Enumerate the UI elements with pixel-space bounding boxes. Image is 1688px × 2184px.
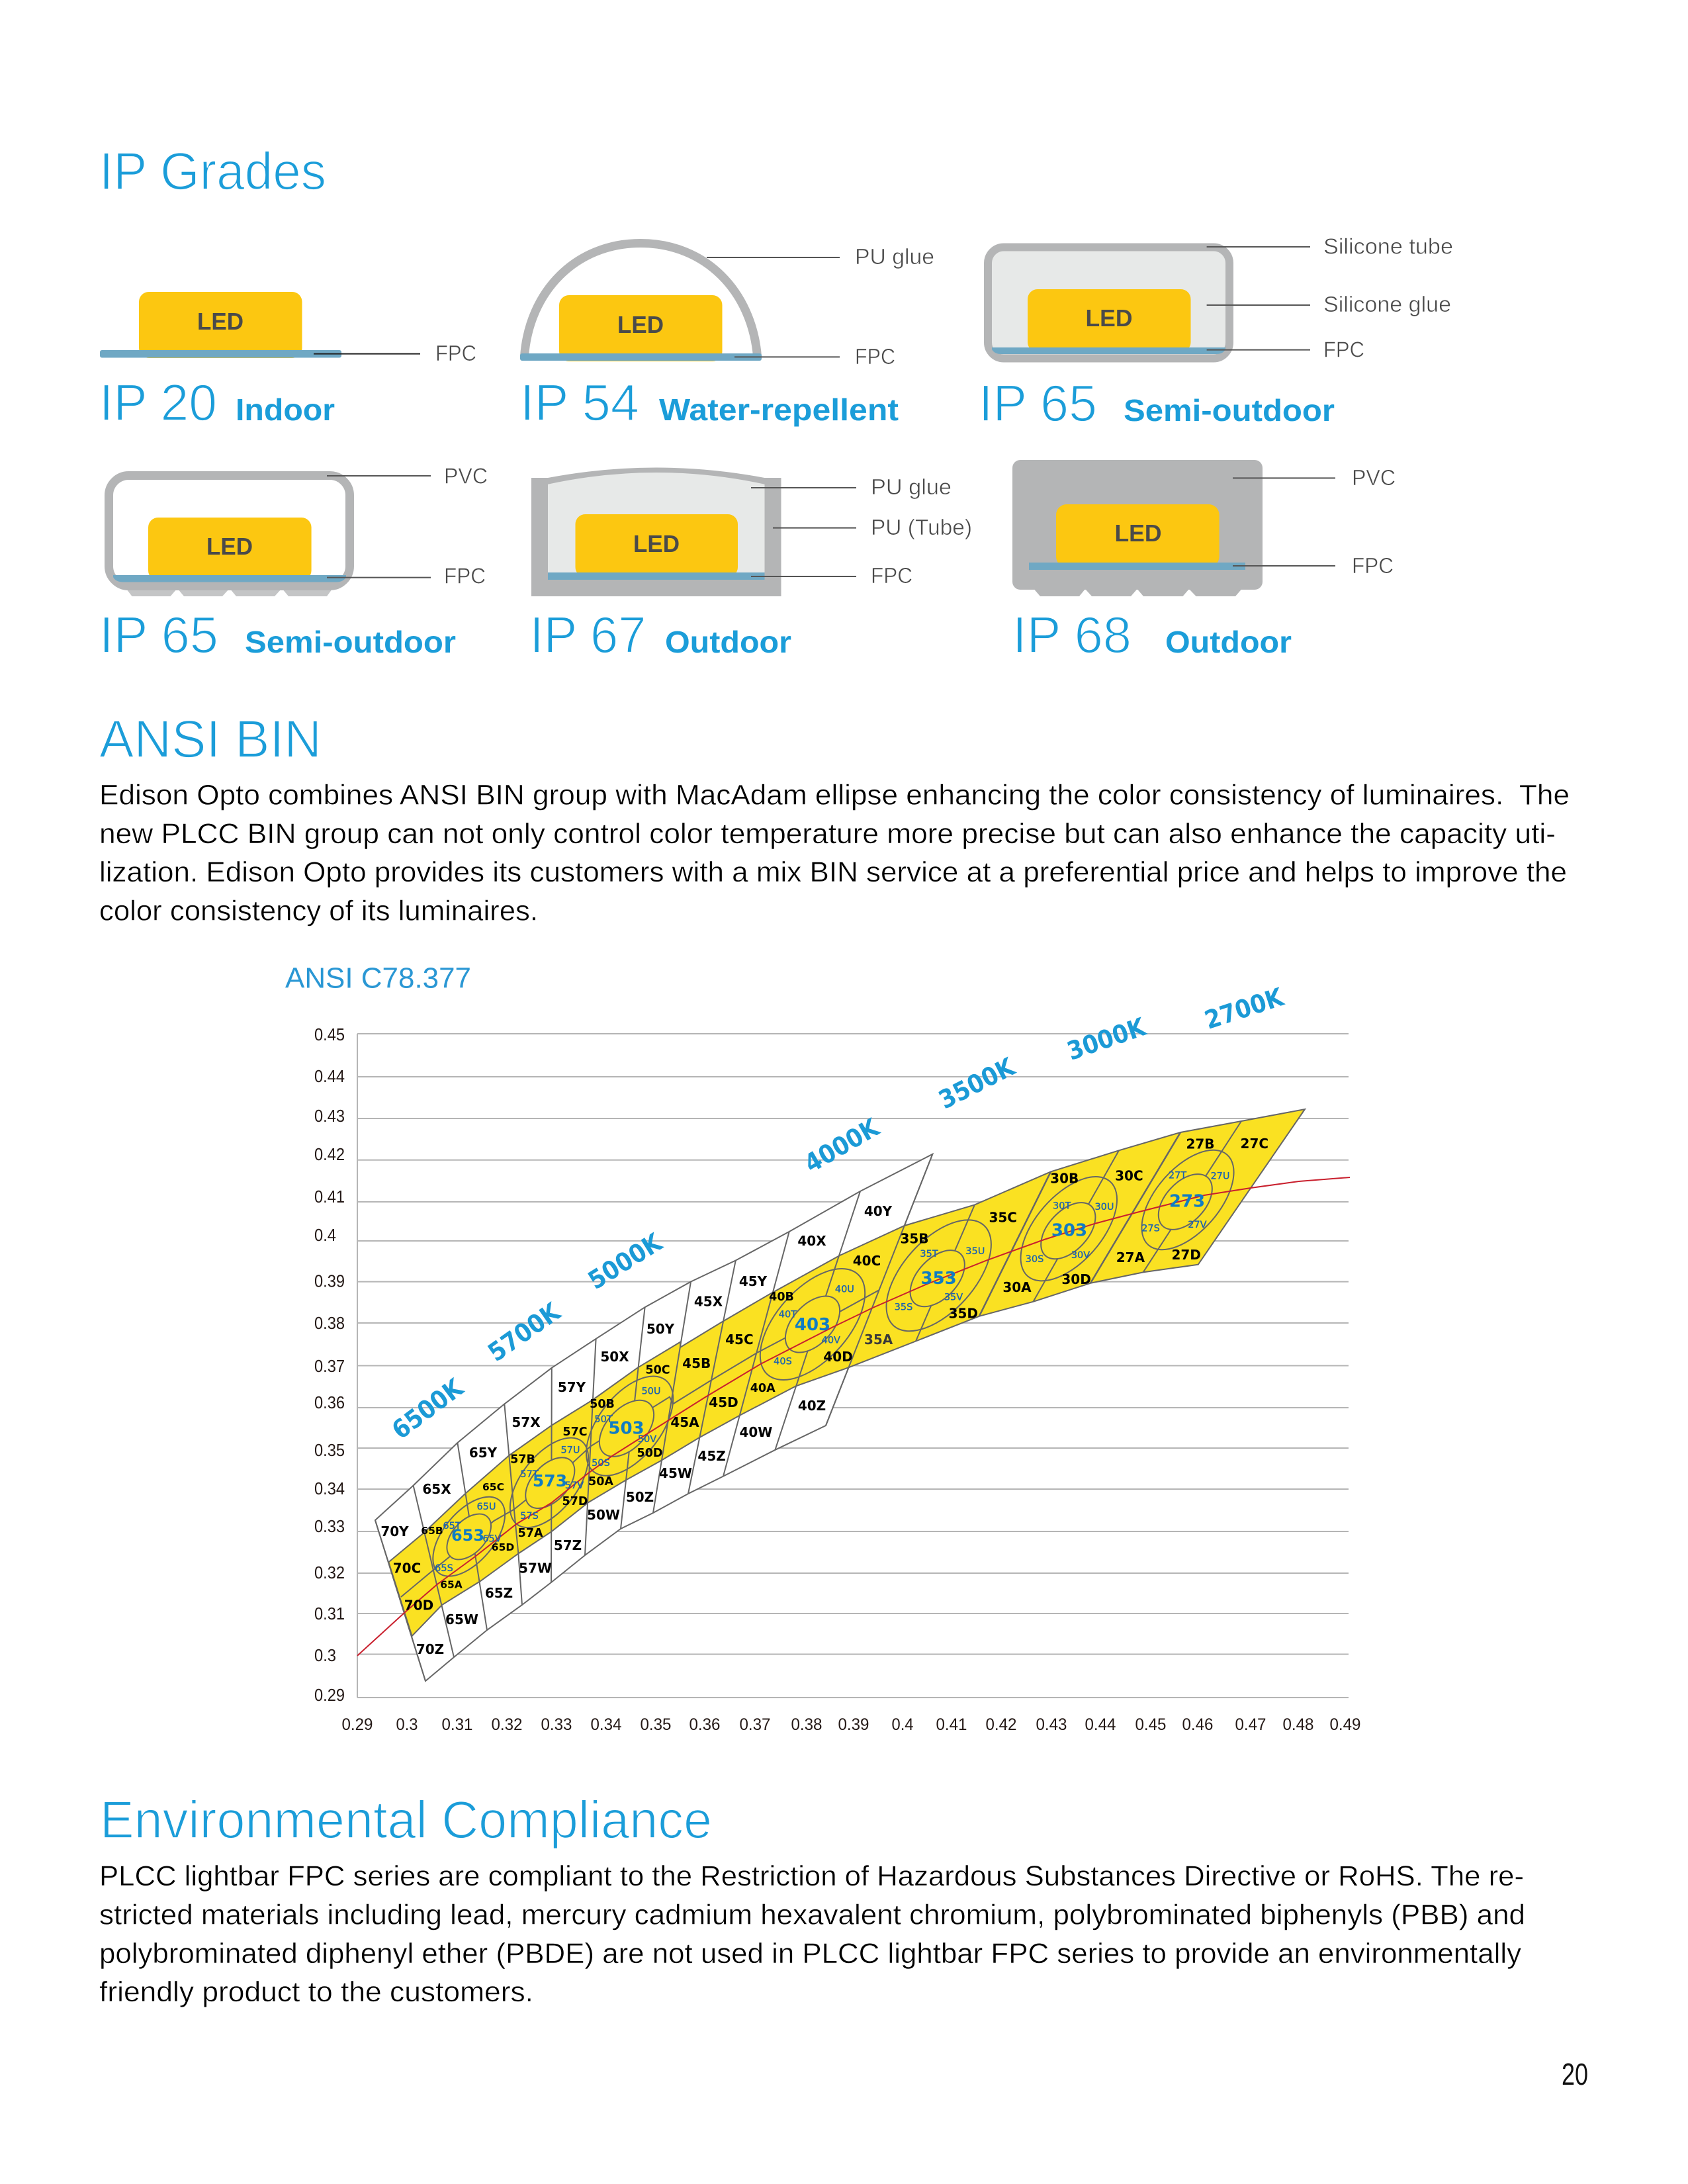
y axis labels: 0.29 xyxy=(314,1685,345,1705)
y axis labels: 0.37 xyxy=(314,1356,345,1376)
colour temperature labels: 3500K xyxy=(934,1052,1020,1115)
label: IP 65 Semi-outdoor: IP 65 xyxy=(979,374,1097,432)
bin labels: outer and main: 57Z xyxy=(554,1537,582,1553)
bin labels: outer and main: 50Y xyxy=(646,1321,675,1337)
bin labels: outer and main: 50X xyxy=(600,1349,629,1365)
bin labels: ellipse sub-bins: 27T xyxy=(1169,1170,1186,1181)
bin labels: ellipse sub-bins: 30T xyxy=(1053,1201,1071,1211)
bin labels: outer and main: 57C xyxy=(562,1426,588,1439)
bin labels: ellipse sub-bins: 40V xyxy=(822,1336,840,1346)
text block: Environmental Compliance description: PLCC lightbar FPC series are compliant to the Restriction of Hazardous Substances Directive or RoHS. The re- xyxy=(99,1860,1524,1892)
icon: IP 20 LED on FPC: LED xyxy=(197,308,244,335)
bin labels: outer and main: 57X xyxy=(511,1414,541,1430)
x axis labels: 0.46 xyxy=(1182,1715,1214,1734)
x axis labels: 0.37 xyxy=(740,1715,770,1734)
bin labels: outer and main: 50C xyxy=(645,1363,670,1377)
bin labels: ellipse centres: 573 xyxy=(533,1471,567,1490)
bin labels: outer and main: 57A xyxy=(518,1527,543,1540)
bin labels: ellipse sub-bins: 50U xyxy=(641,1387,661,1397)
bin labels: outer and main: 45D xyxy=(709,1394,738,1410)
label: IP 54 Water-repellent: IP 54 xyxy=(520,373,639,432)
bin labels: ellipse sub-bins: 65S xyxy=(435,1563,453,1574)
icon: IP 68 solid PVC with LED: LED xyxy=(1114,520,1162,547)
bin labels: outer and main: 35B xyxy=(900,1230,929,1246)
bin labels: outer and main: 40C xyxy=(853,1253,881,1269)
heading: Environmental Compliance: Environmental Compliance xyxy=(100,1790,712,1849)
bin labels: outer and main: 57D xyxy=(562,1495,588,1508)
bin labels: outer and main: 65X xyxy=(422,1481,451,1497)
x axis labels: 0.3 xyxy=(396,1715,418,1734)
bin labels: outer and main: 65Y xyxy=(469,1445,498,1461)
bin labels: ellipse sub-bins: 57U xyxy=(560,1445,580,1456)
y axis labels: 0.36 xyxy=(314,1392,345,1412)
bin labels: outer and main: 40D xyxy=(823,1349,853,1365)
x axis labels: 0.41 xyxy=(936,1715,967,1734)
x axis labels: 0.44 xyxy=(1085,1715,1116,1734)
y axis labels: 0.44 xyxy=(314,1066,345,1086)
x axis labels: 0.4 xyxy=(892,1715,914,1734)
callout: PVC: PVC xyxy=(1352,465,1396,490)
bin labels: ellipse sub-bins: 35U xyxy=(965,1246,985,1257)
bin labels: ellipse sub-bins: 50V xyxy=(638,1434,656,1445)
white outer bin region xyxy=(375,1154,932,1681)
MacAdam ellipses xyxy=(420,1134,1251,1589)
callout: FPC: FPC xyxy=(444,564,486,588)
callout: PU glue: PU glue xyxy=(871,475,952,499)
heading: IP Grades: IP Grades xyxy=(99,142,326,201)
x axis labels: 0.48 xyxy=(1282,1715,1314,1734)
y axis labels: 0.34 xyxy=(314,1479,345,1498)
bin labels: outer and main: 50Z xyxy=(626,1489,654,1505)
y axis labels: 0.38 xyxy=(314,1313,345,1333)
bin labels: outer and main: 57Y xyxy=(558,1379,586,1395)
colour temperature labels: 4000K xyxy=(799,1113,885,1179)
bin labels: outer and main: 27C xyxy=(1241,1136,1268,1152)
yellow central bin band xyxy=(388,1109,1305,1636)
label: IP 65 Semi-outdoor xyxy=(979,374,1335,432)
label: IP 20 Indoor: Indoor xyxy=(236,392,335,427)
bin labels: outer and main: 45Z xyxy=(697,1448,726,1464)
x axis labels: 0.29 xyxy=(341,1715,373,1734)
Planckian locus red curve xyxy=(357,1177,1350,1656)
icon: IP 65 PVC tube with LED: LED xyxy=(206,533,253,560)
callout: PVC: PVC xyxy=(444,464,488,488)
bin labels: outer and main: 45Y xyxy=(739,1273,768,1289)
bin labels: outer and main: 70D xyxy=(404,1598,433,1614)
bin labels: outer and main: 35A xyxy=(864,1332,893,1347)
colour temperature labels: 3000K xyxy=(1063,1012,1150,1066)
text block: Environmental Compliance description xyxy=(99,1860,1525,2008)
text block: ANSI BIN description: color consistency of its luminaires. xyxy=(99,895,538,927)
icon: IP 65 silicone tube with LED xyxy=(988,248,1229,359)
bin labels: outer and main: 50B xyxy=(590,1398,615,1411)
y axis labels: 0.41 xyxy=(314,1187,345,1206)
bin labels: ellipse sub-bins: 35T xyxy=(920,1249,938,1259)
bin labels: ellipse sub-bins: 65V xyxy=(482,1534,502,1545)
bin labels: ellipse sub-bins: 35S xyxy=(895,1302,912,1313)
label: IP 65 Semi-outdoor xyxy=(99,606,456,664)
label: IP 68 Outdoor xyxy=(1012,606,1292,664)
label: IP 65 Semi-outdoor: Semi-outdoor xyxy=(1124,393,1335,428)
label: IP 65 Semi-outdoor: IP 65 xyxy=(99,606,218,664)
x axis labels: 0.38 xyxy=(791,1715,822,1734)
bin labels: outer and main: 40W xyxy=(739,1424,772,1440)
text block: Environmental Compliance description: stricted materials including lead, mercury cadmium hexavalent chromium, polybrominated biphenyls (PBB) and xyxy=(99,1899,1525,1931)
label: IP 20 Indoor: IP 20 xyxy=(99,373,217,432)
bin labels: outer and main: 40A xyxy=(750,1382,776,1395)
label: IP 20 Indoor xyxy=(99,373,335,432)
bin labels: ellipse sub-bins: 65T xyxy=(443,1521,461,1531)
text block: Environmental Compliance description: polybrominated diphenyl ether (PBDE) are not used in PLCC lightbar FPC series to provide an environmentally xyxy=(99,1938,1522,1970)
y axis labels: 0.39 xyxy=(314,1271,345,1291)
bin labels: ellipse sub-bins: 57S xyxy=(520,1511,539,1522)
label: IP 68 Outdoor: Outdoor xyxy=(1165,625,1292,659)
panel: IP 65 semi-outdoor silicone xyxy=(979,234,1453,432)
bin labels: outer and main: 30B xyxy=(1050,1171,1079,1187)
bin labels: outer and main: 45C xyxy=(725,1332,754,1347)
bin labels: outer and main: 30D xyxy=(1061,1271,1091,1287)
icon: IP 67 PU tube with LED xyxy=(531,467,781,596)
text block: ANSI BIN description xyxy=(99,780,1570,927)
colour temperature labels: 6500K xyxy=(386,1373,469,1445)
y axis labels: 0.32 xyxy=(314,1563,345,1582)
bin labels: ellipse centres xyxy=(451,1191,1205,1545)
chart title: ANSI C78.377: ANSI C78.377 xyxy=(285,962,471,995)
bin labels: ellipse centres: 273 xyxy=(1169,1191,1205,1211)
callout: Silicone glue: Silicone glue xyxy=(1323,292,1451,316)
x axis labels: 0.31 xyxy=(442,1715,472,1734)
icon: IP 20 LED on FPC xyxy=(100,292,341,358)
callout: FPC: FPC xyxy=(1352,553,1394,578)
colour temperature labels: 5700K xyxy=(482,1297,566,1367)
bin labels: outer and main: 45X xyxy=(694,1294,723,1310)
bin labels: outer and main: 30A xyxy=(1002,1279,1032,1295)
x axis labels: 0.45 xyxy=(1135,1715,1166,1734)
bin labels: ellipse sub-bins: 30U xyxy=(1094,1202,1114,1212)
bin labels: outer and main: 57W xyxy=(519,1561,552,1576)
icon: IP 65 PVC tube with LED xyxy=(109,475,349,596)
text block: ANSI BIN description: new PLCC BIN group can not only control color temperature more precise but can also enhance the capacity uti- xyxy=(99,818,1556,850)
y axis labels: 0.42 xyxy=(314,1144,345,1164)
y axis labels: 0.33 xyxy=(314,1516,345,1536)
bin labels: outer and main: 70C xyxy=(393,1561,421,1576)
bin labels: outer and main: 45A xyxy=(670,1414,699,1430)
y axis labels xyxy=(314,1024,345,1705)
bin labels: outer and main: 50W xyxy=(587,1507,620,1523)
callout: FPC: FPC xyxy=(435,341,476,365)
panel: IP 68 outdoor xyxy=(1012,460,1396,664)
icon: IP 54 dome with LED xyxy=(520,244,762,361)
bin labels: ellipse sub-bins: 27U xyxy=(1210,1171,1230,1182)
x axis labels: 0.47 xyxy=(1235,1715,1266,1734)
label: IP 68 Outdoor: IP 68 xyxy=(1012,606,1132,664)
panel: IP 54 water-repellent xyxy=(520,244,934,432)
y axis labels: 0.4 xyxy=(314,1225,336,1245)
y axis labels: 0.35 xyxy=(314,1440,345,1460)
x axis labels: 0.43 xyxy=(1036,1715,1067,1734)
callout: PU glue: PU glue xyxy=(855,244,934,269)
icon: IP 68 solid PVC with LED xyxy=(1012,460,1263,596)
x axis labels: 0.32 xyxy=(491,1715,523,1734)
bin labels: ellipse centres: 403 xyxy=(795,1315,830,1335)
bin labels: outer and main: 40Y xyxy=(864,1203,893,1219)
bin labels: outer and main: 27D xyxy=(1171,1247,1201,1263)
colour temperature labels: 5000K xyxy=(583,1227,668,1295)
x axis labels: 0.42 xyxy=(986,1715,1016,1734)
x axis labels: 0.36 xyxy=(689,1715,720,1734)
callout: PU (Tube): PU (Tube) xyxy=(871,515,972,539)
x axis labels xyxy=(341,1715,1360,1734)
bin labels: outer and main: 57B xyxy=(510,1453,535,1467)
bin labels: ellipse sub-bins: 65U xyxy=(476,1502,496,1512)
bin labels: ellipse sub-bins: 27S xyxy=(1141,1224,1160,1234)
text block: ANSI BIN description: lization. Edison Opto provides its customers with a mix BIN service at a preferential price and helps to improve the xyxy=(99,856,1567,888)
bin labels: outer and main: 65D xyxy=(492,1541,514,1553)
bin labels: outer and main: 40X xyxy=(797,1233,826,1249)
bin labels: ellipse sub-bins: 27V xyxy=(1188,1220,1207,1230)
bin labels: ellipse sub-bins: 40S xyxy=(774,1357,792,1367)
y axis labels: 0.3 xyxy=(314,1645,336,1665)
bin labels: ellipse sub-bins: 40U xyxy=(835,1284,854,1295)
label: IP 54 Water-repellent: Water-repellent xyxy=(659,392,899,427)
page number: 20 xyxy=(1562,2057,1588,2091)
x axis labels: 0.39 xyxy=(838,1715,869,1734)
bin labels: ellipse sub-bins xyxy=(435,1170,1230,1574)
bin labels: outer and main: 65A xyxy=(440,1579,463,1591)
chart: ANSI C78.377 chromaticity bins xyxy=(314,982,1360,1734)
colour temperature labels xyxy=(386,982,1288,1445)
bin labels: ellipse centres: 653 xyxy=(451,1526,484,1545)
bin labels: ellipse sub-bins: 30S xyxy=(1026,1254,1044,1265)
x axis labels: 0.35 xyxy=(641,1715,671,1734)
icon: IP 65 silicone tube with LED: LED xyxy=(1085,304,1133,332)
bin labels: outer and main: 70Z xyxy=(416,1641,444,1657)
bin labels: ellipse sub-bins: 57T xyxy=(520,1469,539,1480)
bin labels: ellipse sub-bins: 35V xyxy=(944,1293,963,1303)
callout: FPC: FPC xyxy=(871,563,912,588)
text block: Environmental Compliance description: friendly product to the customers. xyxy=(99,1976,533,2008)
bin labels: ellipse sub-bins: 30V xyxy=(1071,1250,1090,1261)
panel: IP 20 indoor xyxy=(99,292,476,432)
bin labels: outer and main: 45W xyxy=(659,1465,692,1481)
callout: FPC: FPC xyxy=(1323,338,1364,362)
bin labels: ellipse sub-bins: 50T xyxy=(594,1414,613,1425)
colour temperature labels: 2700K xyxy=(1201,982,1288,1035)
x axis labels: 0.33 xyxy=(541,1715,572,1734)
label: IP 54 Water-repellent xyxy=(520,373,899,432)
bin labels: outer and main: 40B xyxy=(769,1291,794,1304)
bin labels: ellipse sub-bins: 50S xyxy=(592,1458,610,1469)
x axis labels: 0.34 xyxy=(590,1715,622,1734)
bin labels: outer and main: 65Z xyxy=(485,1585,513,1601)
bin labels: outer and main: 50D xyxy=(637,1447,662,1460)
bin labels: ellipse centres: 353 xyxy=(920,1269,957,1289)
bin labels: ellipse centres: 503 xyxy=(608,1418,644,1438)
x axis labels: 0.49 xyxy=(1330,1715,1360,1734)
bin labels: ellipse sub-bins: 40T xyxy=(779,1309,797,1320)
heading: ANSI BIN: ANSI BIN xyxy=(99,709,322,768)
bin labels: outer and main: 35C xyxy=(989,1209,1017,1225)
bin labels: ellipse centres: 303 xyxy=(1051,1221,1087,1241)
bin labels: outer and main: 40Z xyxy=(798,1398,826,1414)
text block: ANSI BIN description: Edison Opto combines ANSI BIN group with MacAdam ellipse enhancing the color consistency of luminaires. The xyxy=(99,780,1570,811)
y axis labels: 0.45 xyxy=(314,1024,345,1044)
panel: IP 67 outdoor xyxy=(529,467,972,664)
bin labels: outer and main: 27B xyxy=(1186,1136,1215,1152)
icon: IP 67 PU tube with LED: LED xyxy=(633,530,680,557)
y axis labels: 0.31 xyxy=(314,1604,345,1623)
bin labels: outer and main: 45B xyxy=(682,1355,711,1371)
bin divider lines xyxy=(375,1121,1241,1681)
bin labels: outer and main: 35D xyxy=(949,1306,978,1322)
bin labels: outer and main: 50A xyxy=(588,1475,613,1488)
bin labels: outer and main: 65W xyxy=(445,1612,478,1627)
y axis labels: 0.43 xyxy=(314,1106,345,1126)
label: IP 65 Semi-outdoor: Semi-outdoor xyxy=(245,625,456,659)
label: IP 67 Outdoor: Outdoor xyxy=(665,625,791,659)
bin labels: outer and main: 65C xyxy=(482,1481,504,1493)
bin labels: outer and main: 65B xyxy=(421,1525,443,1537)
bin labels: outer and main: 30C xyxy=(1115,1167,1143,1183)
bin labels: outer and main: 70Y xyxy=(380,1524,409,1539)
panel: IP 65 semi-outdoor PVC xyxy=(99,464,488,664)
icon: IP 54 dome with LED: LED xyxy=(617,311,664,338)
callout: FPC: FPC xyxy=(855,344,895,369)
bin labels: outer and main xyxy=(380,1136,1268,1657)
callout: Silicone tube: Silicone tube xyxy=(1323,234,1453,258)
label: IP 67 Outdoor xyxy=(529,606,791,664)
bin labels: ellipse sub-bins: 57V xyxy=(565,1480,584,1491)
label: IP 67 Outdoor: IP 67 xyxy=(529,606,646,664)
bin labels: outer and main: 27A xyxy=(1116,1250,1145,1265)
